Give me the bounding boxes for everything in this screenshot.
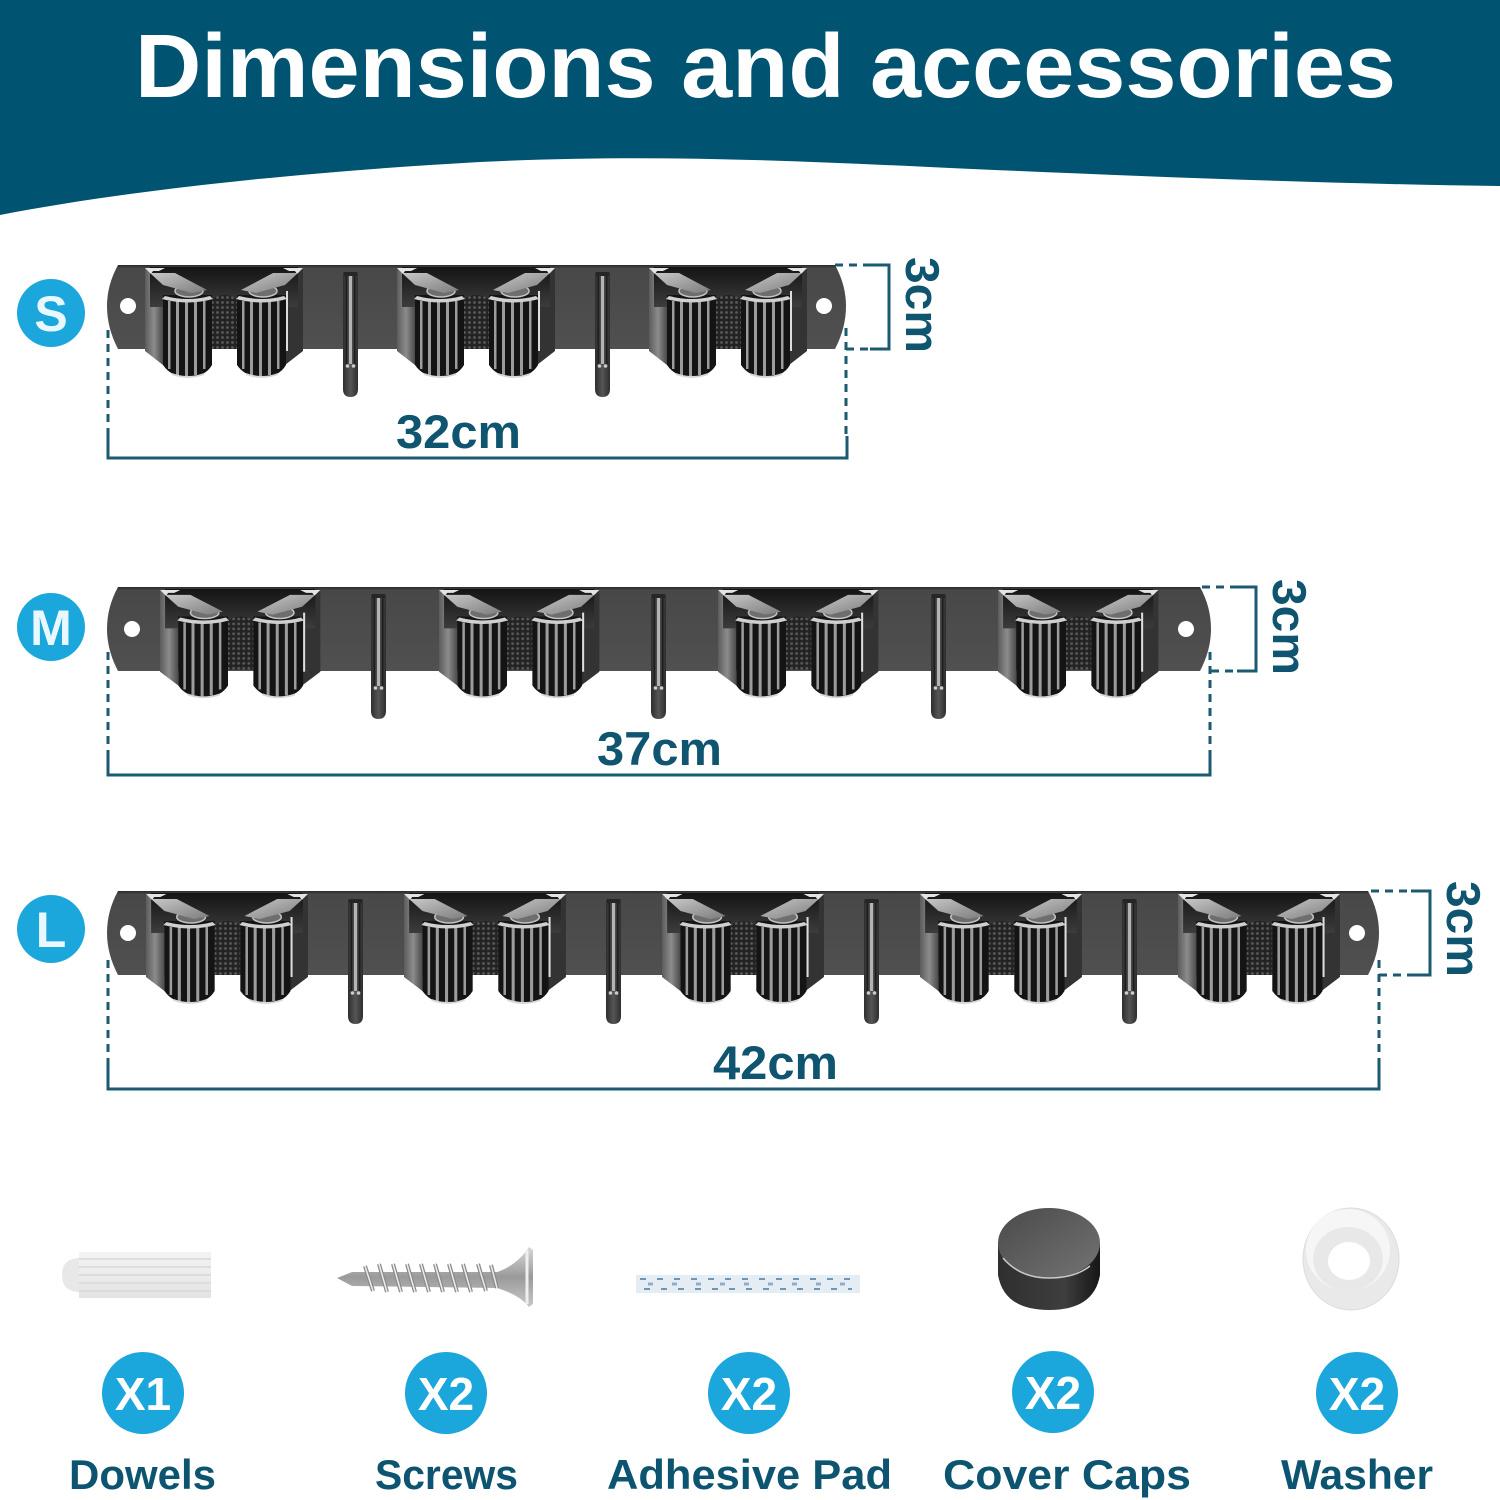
badge: X1 xyxy=(102,1352,184,1434)
icon: dowel xyxy=(62,1252,211,1298)
rail L xyxy=(107,891,1379,1024)
accessory: adhesive pad xyxy=(607,1275,892,1498)
icon: washer xyxy=(1303,1208,1399,1310)
height dimension S xyxy=(835,257,949,353)
badge: X2: X2 xyxy=(1025,1367,1081,1419)
label: Dowels: Dowels xyxy=(69,1451,216,1498)
icon: screw xyxy=(337,1247,533,1307)
badge: X2 xyxy=(1012,1351,1094,1433)
width dimension M xyxy=(108,652,1210,775)
width dimension L: 42cm xyxy=(713,1036,838,1089)
rail S xyxy=(107,265,846,397)
badge: X2: X2 xyxy=(721,1368,777,1420)
width dimension S xyxy=(108,328,847,458)
width dimension S: 32cm xyxy=(396,405,521,458)
label: Adhesive Pad: Adhesive Pad xyxy=(607,1451,892,1498)
rail M xyxy=(107,587,1211,719)
badge: X2: X2 xyxy=(418,1368,474,1420)
badge: X2: X2 xyxy=(1329,1368,1385,1420)
header banner xyxy=(0,0,1500,215)
height dimension M xyxy=(1202,579,1316,675)
height dimension L: 3cm xyxy=(1437,881,1490,977)
label: Screws: Screws xyxy=(375,1451,518,1498)
icon: cover cap xyxy=(998,1208,1100,1310)
badge: M xyxy=(17,593,85,661)
panel: size M xyxy=(17,579,1316,775)
badge: X2 xyxy=(708,1352,790,1434)
width dimension L xyxy=(108,960,1379,1089)
badge: S xyxy=(17,279,85,347)
title: Dimensions and accessories xyxy=(135,17,1396,117)
panel: size L xyxy=(17,881,1490,1089)
height dimension L xyxy=(1371,881,1490,977)
label: Washer: Washer xyxy=(1281,1451,1433,1498)
label: Cover Caps: Cover Caps xyxy=(943,1451,1191,1498)
badge: X2 xyxy=(1316,1352,1398,1434)
badge: X2 xyxy=(405,1352,487,1434)
badge: L: L xyxy=(36,902,66,958)
icon: adhesive strip xyxy=(636,1275,860,1293)
badge: X1: X1 xyxy=(115,1368,171,1420)
accessory: washer xyxy=(1281,1208,1433,1498)
badge: S: S xyxy=(34,286,68,342)
badge: M: M xyxy=(30,600,72,656)
accessory: cover caps xyxy=(943,1208,1191,1498)
accessory: screws xyxy=(337,1247,533,1498)
badge: L xyxy=(17,895,85,963)
panel: size S xyxy=(17,257,949,458)
width dimension M: 37cm xyxy=(597,722,722,775)
height dimension M: 3cm xyxy=(1263,579,1316,675)
height dimension S: 3cm xyxy=(896,257,949,353)
accessory: dowels xyxy=(62,1252,216,1498)
